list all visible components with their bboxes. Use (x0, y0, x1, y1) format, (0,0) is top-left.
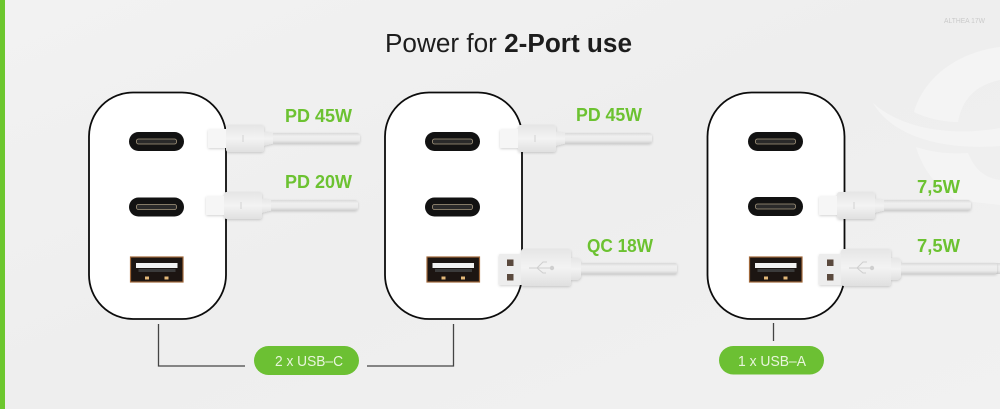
port: USB-C top (425, 132, 480, 151)
charger 1 (89, 92, 226, 319)
port: USB-A (427, 257, 480, 282)
port: USB-C bottom (748, 197, 803, 216)
connector: USB-C right (367, 324, 454, 366)
label: PD 20W: PD 20W (285, 172, 352, 192)
port: USB-C top (129, 132, 184, 151)
connector: USB-A (772, 323, 774, 341)
port: USB-C bottom (425, 198, 480, 216)
pill: 1 x USB-A (719, 346, 824, 374)
green side bar (0, 0, 5, 409)
port: USB-A (130, 257, 183, 282)
cable: USB-A 7,5W (819, 249, 1000, 286)
logo watermark (873, 47, 1000, 205)
label: 7,5W top: 7,5W (917, 177, 960, 197)
port: USB-A (750, 257, 802, 282)
label: PD 45W: PD 45W (285, 106, 352, 126)
title: Power for 2-Port use (385, 30, 632, 58)
label: QC 18W: QC 18W (587, 236, 653, 256)
cable: USB-C 7,5W (819, 192, 971, 219)
label: 7,5W bottom: 7,5W (917, 236, 960, 256)
port: USB-C top (748, 132, 803, 151)
model tag: ALTHEA 17W (944, 16, 986, 25)
pill: 2 x USB-C: 2 x USB–C (275, 353, 343, 370)
cable: USB-C PD 45W (500, 125, 652, 152)
cable: USB-C PD 45W (208, 125, 360, 152)
cable: USB-C PD 20W (206, 192, 358, 219)
cable: USB-A QC 18W (499, 249, 677, 286)
charger 3 (708, 92, 844, 319)
label: PD 45W: PD 45W (576, 105, 642, 125)
connector: USB-C left (158, 324, 245, 366)
pill: 2 x USB-C (254, 346, 359, 375)
charger 2 (385, 92, 522, 319)
pill: 1 x USB-A: 1 x USB–A (738, 353, 806, 370)
port: USB-C bottom (129, 198, 184, 216)
